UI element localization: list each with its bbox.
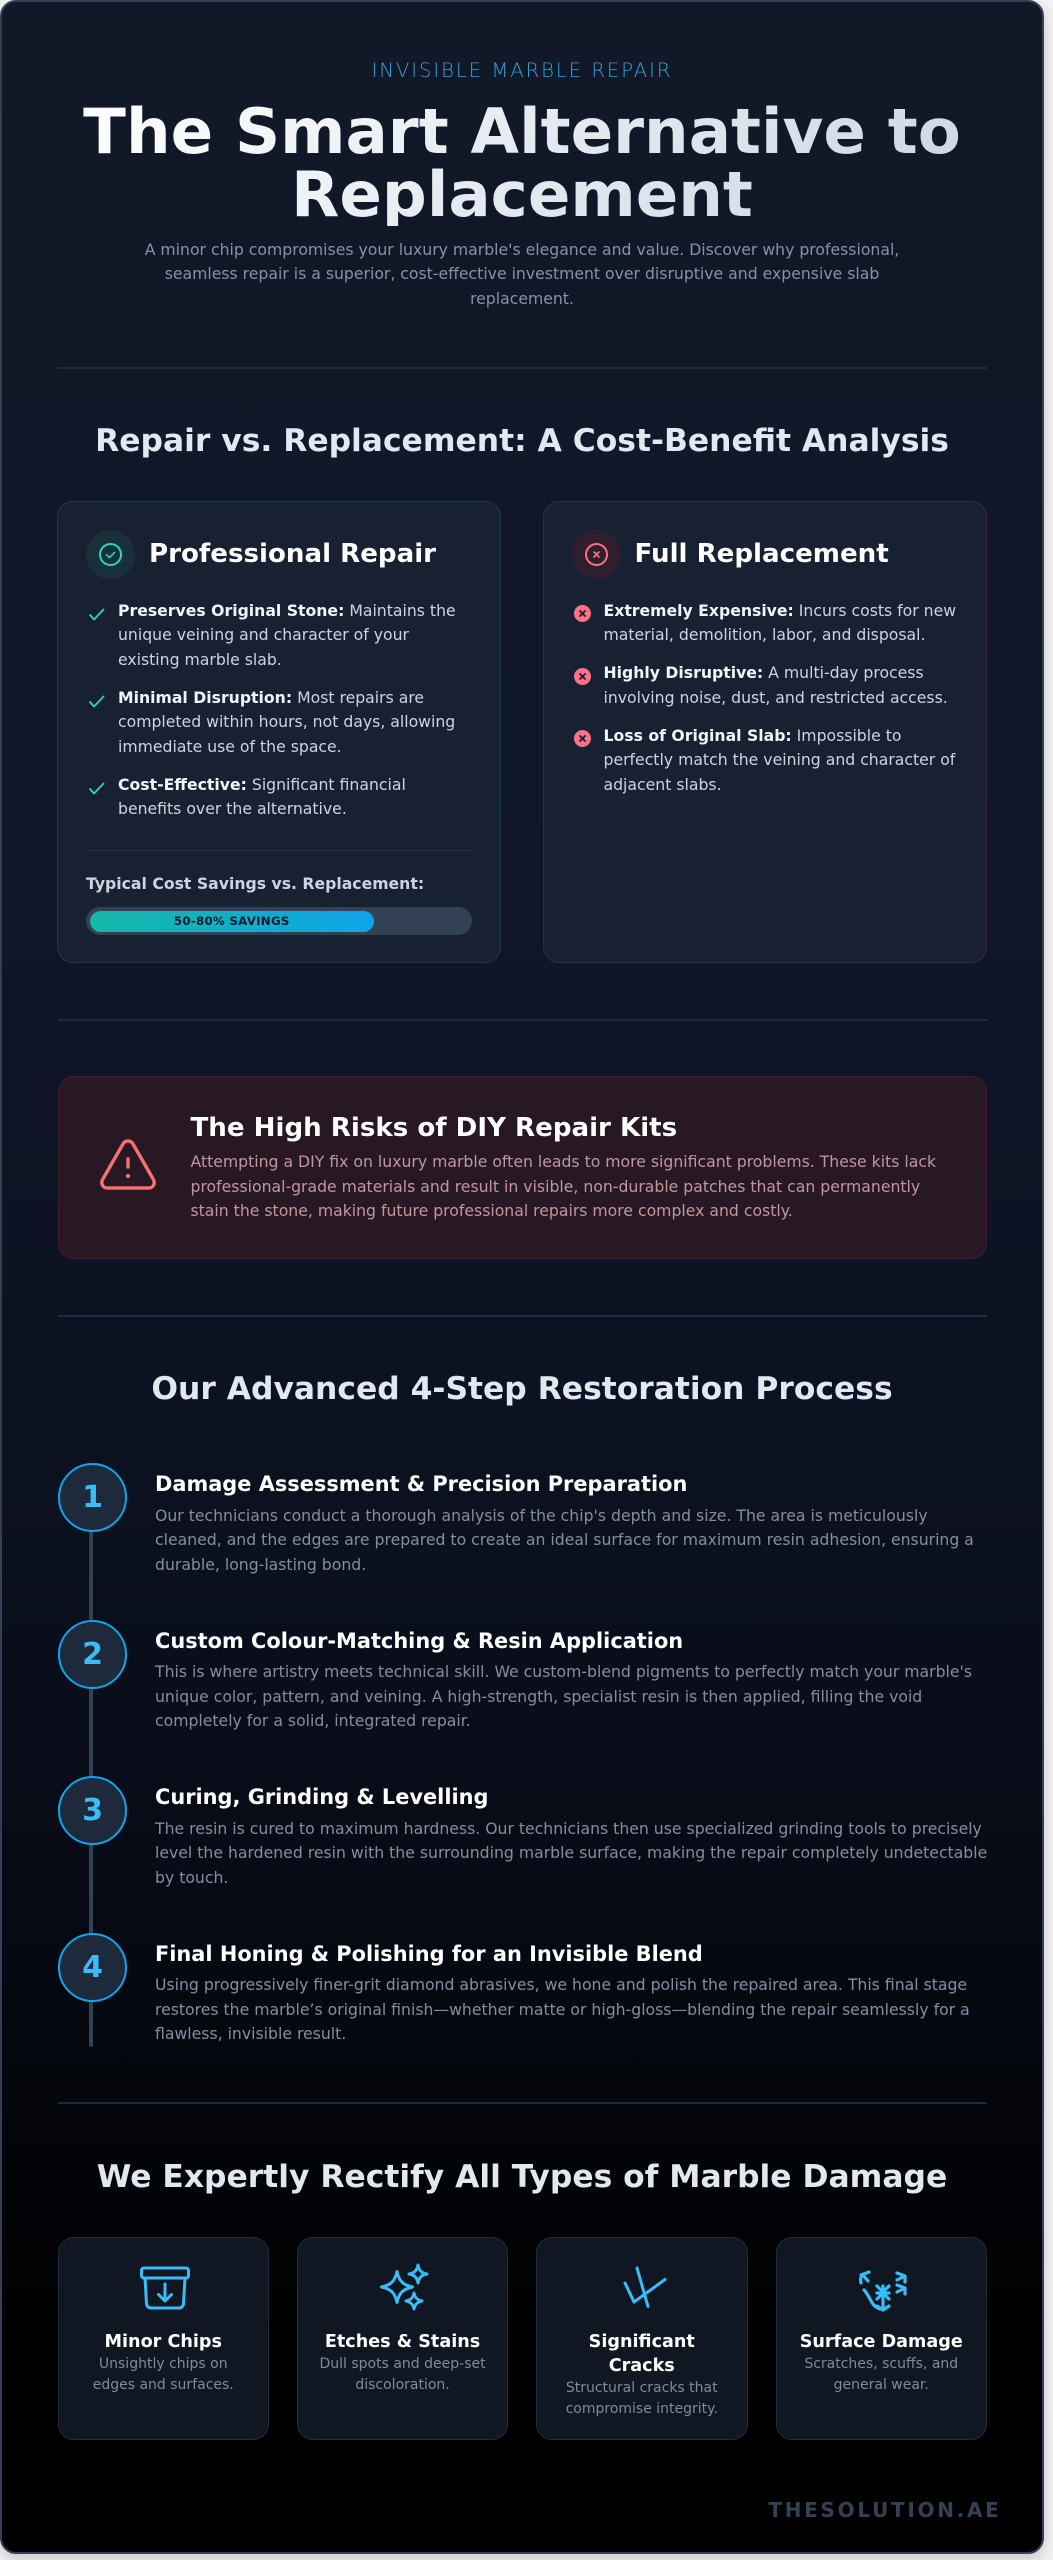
list item: immediate use of the space.	[118, 736, 342, 756]
step number: 2	[82, 1636, 103, 1672]
step text: level the hardened resin with the surrounding marble surface, making the repair completely undetectable	[155, 1843, 987, 1862]
step text: durable, long-lasting bond.	[155, 1554, 366, 1574]
icon: check	[89, 608, 104, 620]
callout text: Attempting a DIY fix on luxury marble often leads to more significant problems. These kits lack	[190, 1152, 936, 1171]
card text: edges and surfaces.	[93, 2376, 234, 2392]
step text: restores the marble’s original finish—whether matte or high-gloss—blending the repair seamlessly for a	[155, 2000, 970, 2018]
footer brand: THESOLUTION.AE	[768, 2498, 1002, 2522]
panel: significant cracks	[536, 2237, 748, 2440]
step number	[58, 1463, 127, 1532]
card title: Significant	[589, 2332, 695, 2352]
list item	[118, 774, 406, 818]
step number: 3	[82, 1793, 103, 1828]
step text: by touch.	[155, 1868, 228, 1886]
subtitle	[144, 240, 899, 308]
icon: crack	[623, 2266, 667, 2308]
step 4	[58, 1933, 970, 2043]
step text: completely for a solid, integrated repair.	[155, 1711, 471, 1730]
card title: Etches & Stains	[325, 2332, 480, 2352]
subtitle: A minor chip compromises your luxury marble's elegance and value. Discover why professional,	[145, 240, 899, 258]
panel heading: Full Replacement	[634, 539, 889, 569]
eyebrow label: INVISIBLE MARBLE REPAIR	[372, 59, 672, 82]
step number: 4	[82, 1950, 103, 1984]
list item: Highly Disruptive: A multi-day process	[604, 663, 924, 682]
list item: unique veining and character of your	[118, 625, 409, 644]
icon: sparkles	[380, 2264, 428, 2310]
step text: This is where artistry meets technical skill. We custom-blend pigments to perfectly match your marble's	[155, 1662, 972, 1681]
list item	[118, 600, 456, 668]
list item	[118, 688, 455, 756]
progress fill	[90, 910, 374, 932]
callout text: stain the stone, making future professional repairs more complex and costly.	[190, 1201, 793, 1220]
step text	[154, 1818, 987, 1886]
card text: compromise integrity.	[566, 2401, 718, 2417]
callout heading: The High Risks of DIY Repair Kits	[190, 1113, 677, 1143]
panel: professional repair	[57, 501, 501, 963]
list item: existing marble slab.	[118, 650, 282, 668]
card text	[93, 2356, 234, 2392]
card text	[804, 2356, 958, 2392]
step text: unique color, pattern, and veining. A high-strength, specialist resin is then applied, filling the void	[155, 1686, 922, 1706]
card text: Structural cracks that	[566, 2380, 718, 2396]
step number	[58, 1776, 127, 1845]
heading: cost-benefit: Repair vs. Replacement: A Cost-Benefit Analysis	[95, 423, 949, 459]
heading: process: Our Advanced 4-Step Restoration Process	[151, 1371, 893, 1407]
card text: discoloration.	[355, 2376, 450, 2392]
list: repair benefits	[89, 600, 456, 818]
icon: archive box	[140, 2266, 190, 2310]
icon: check	[89, 696, 104, 708]
icon: surface damage	[859, 2270, 907, 2312]
progress bar	[86, 907, 472, 935]
step text: Using progressively finer-grit diamond abrasives, we hone and polish the repaired area. This final stage	[155, 1975, 967, 1994]
panel: surface damage	[776, 2237, 987, 2440]
icon: x bullet	[574, 668, 591, 685]
subtitle: replacement.	[470, 288, 574, 308]
title: Replacement	[291, 158, 753, 230]
card title: Minor Chips	[104, 2332, 222, 2352]
card text: Scratches, scuffs, and	[804, 2356, 958, 2372]
step text	[155, 1506, 974, 1574]
subtitle: seamless repair is a superior, cost-effective investment over disruptive and expensive slab	[165, 264, 879, 283]
panel heading: Professional Repair	[149, 539, 436, 569]
list item: Extremely Expensive: Incurs costs for new	[604, 600, 956, 620]
title	[70, 100, 974, 226]
list item: adjacent slabs.	[604, 774, 722, 794]
step number	[58, 1620, 127, 1688]
step number	[58, 1932, 127, 2002]
step number: 1	[82, 1480, 103, 1515]
step title: Custom Colour-Matching & Resin Application	[155, 1628, 683, 1652]
icon: x bullet	[574, 730, 591, 747]
callout: DIY risks	[58, 1076, 986, 1259]
list item: material, demolition, labor, and disposal.	[604, 625, 926, 644]
step text	[155, 1975, 970, 2043]
step text: Our technicians conduct a thorough analysis of the chip's depth and size. The area is meticulously	[155, 1506, 928, 1524]
list item: benefits over the alternative.	[118, 799, 347, 818]
savings label: Typical Cost Savings vs. Replacement:	[86, 874, 424, 892]
icon: warning triangle	[100, 1139, 156, 1190]
card title: Cracks	[609, 2356, 675, 2376]
list item: Preserves Original Stone: Maintains the	[118, 600, 456, 620]
card title: Surface Damage	[800, 2332, 963, 2352]
list item: perfectly match the veining and character of	[604, 750, 955, 769]
step text: flawless, invisible result.	[155, 2024, 346, 2043]
icon: check	[89, 782, 104, 794]
card text: general wear.	[834, 2376, 929, 2392]
step 1	[58, 1463, 974, 1574]
list item: completed within hours, not days, allowing	[118, 712, 455, 731]
step text: The resin is cured to maximum hardness. Our technicians then use specialized grinding tools to precisely	[155, 1818, 982, 1838]
panel: full replacement	[543, 501, 987, 963]
list item	[604, 663, 948, 706]
timeline line	[89, 1497, 92, 2047]
step text: cleaned, and the edges are prepared to create an ideal surface for maximum resin adhesion, ensuring a	[155, 1530, 974, 1549]
card text: Dull spots and deep-set	[319, 2356, 486, 2372]
card text	[566, 2380, 718, 2417]
callout text	[190, 1152, 936, 1220]
card text	[319, 2356, 486, 2392]
icon: x circle	[572, 530, 621, 579]
step 3	[58, 1776, 987, 1886]
icon: x bullet	[574, 605, 591, 622]
step title: Final Honing & Polishing for an Invisible Blend	[155, 1942, 703, 1966]
heading: damage types: We Expertly Rectify All Types of Marble Damage	[97, 2158, 947, 2194]
card title	[589, 2332, 695, 2376]
step text	[154, 1662, 972, 1730]
step 2	[58, 1620, 972, 1730]
step title: Damage Assessment & Precision Preparation	[155, 1472, 687, 1496]
list item	[604, 726, 956, 794]
progress fill: 50-80% SAVINGS	[174, 914, 290, 928]
list: replacement drawbacks	[574, 600, 956, 794]
panel: minor chips	[58, 2237, 269, 2440]
list item: Cost-Effective: Significant financial	[118, 774, 406, 794]
card text: Unsightly chips on	[99, 2356, 228, 2372]
list item: involving noise, dust, and restricted access.	[604, 688, 948, 706]
list item: Loss of Original Slab: Impossible to	[604, 726, 901, 744]
panel: etches and stains	[297, 2237, 508, 2440]
callout text: professional-grade materials and result in visible, non-durable patches that can permanently	[190, 1176, 920, 1196]
list item: Minimal Disruption: Most repairs are	[118, 688, 424, 706]
step title: Curing, Grinding & Levelling	[155, 1785, 488, 1809]
list item	[604, 600, 956, 644]
title: The Smart Alternative to	[83, 94, 961, 168]
icon: check circle	[86, 530, 135, 579]
